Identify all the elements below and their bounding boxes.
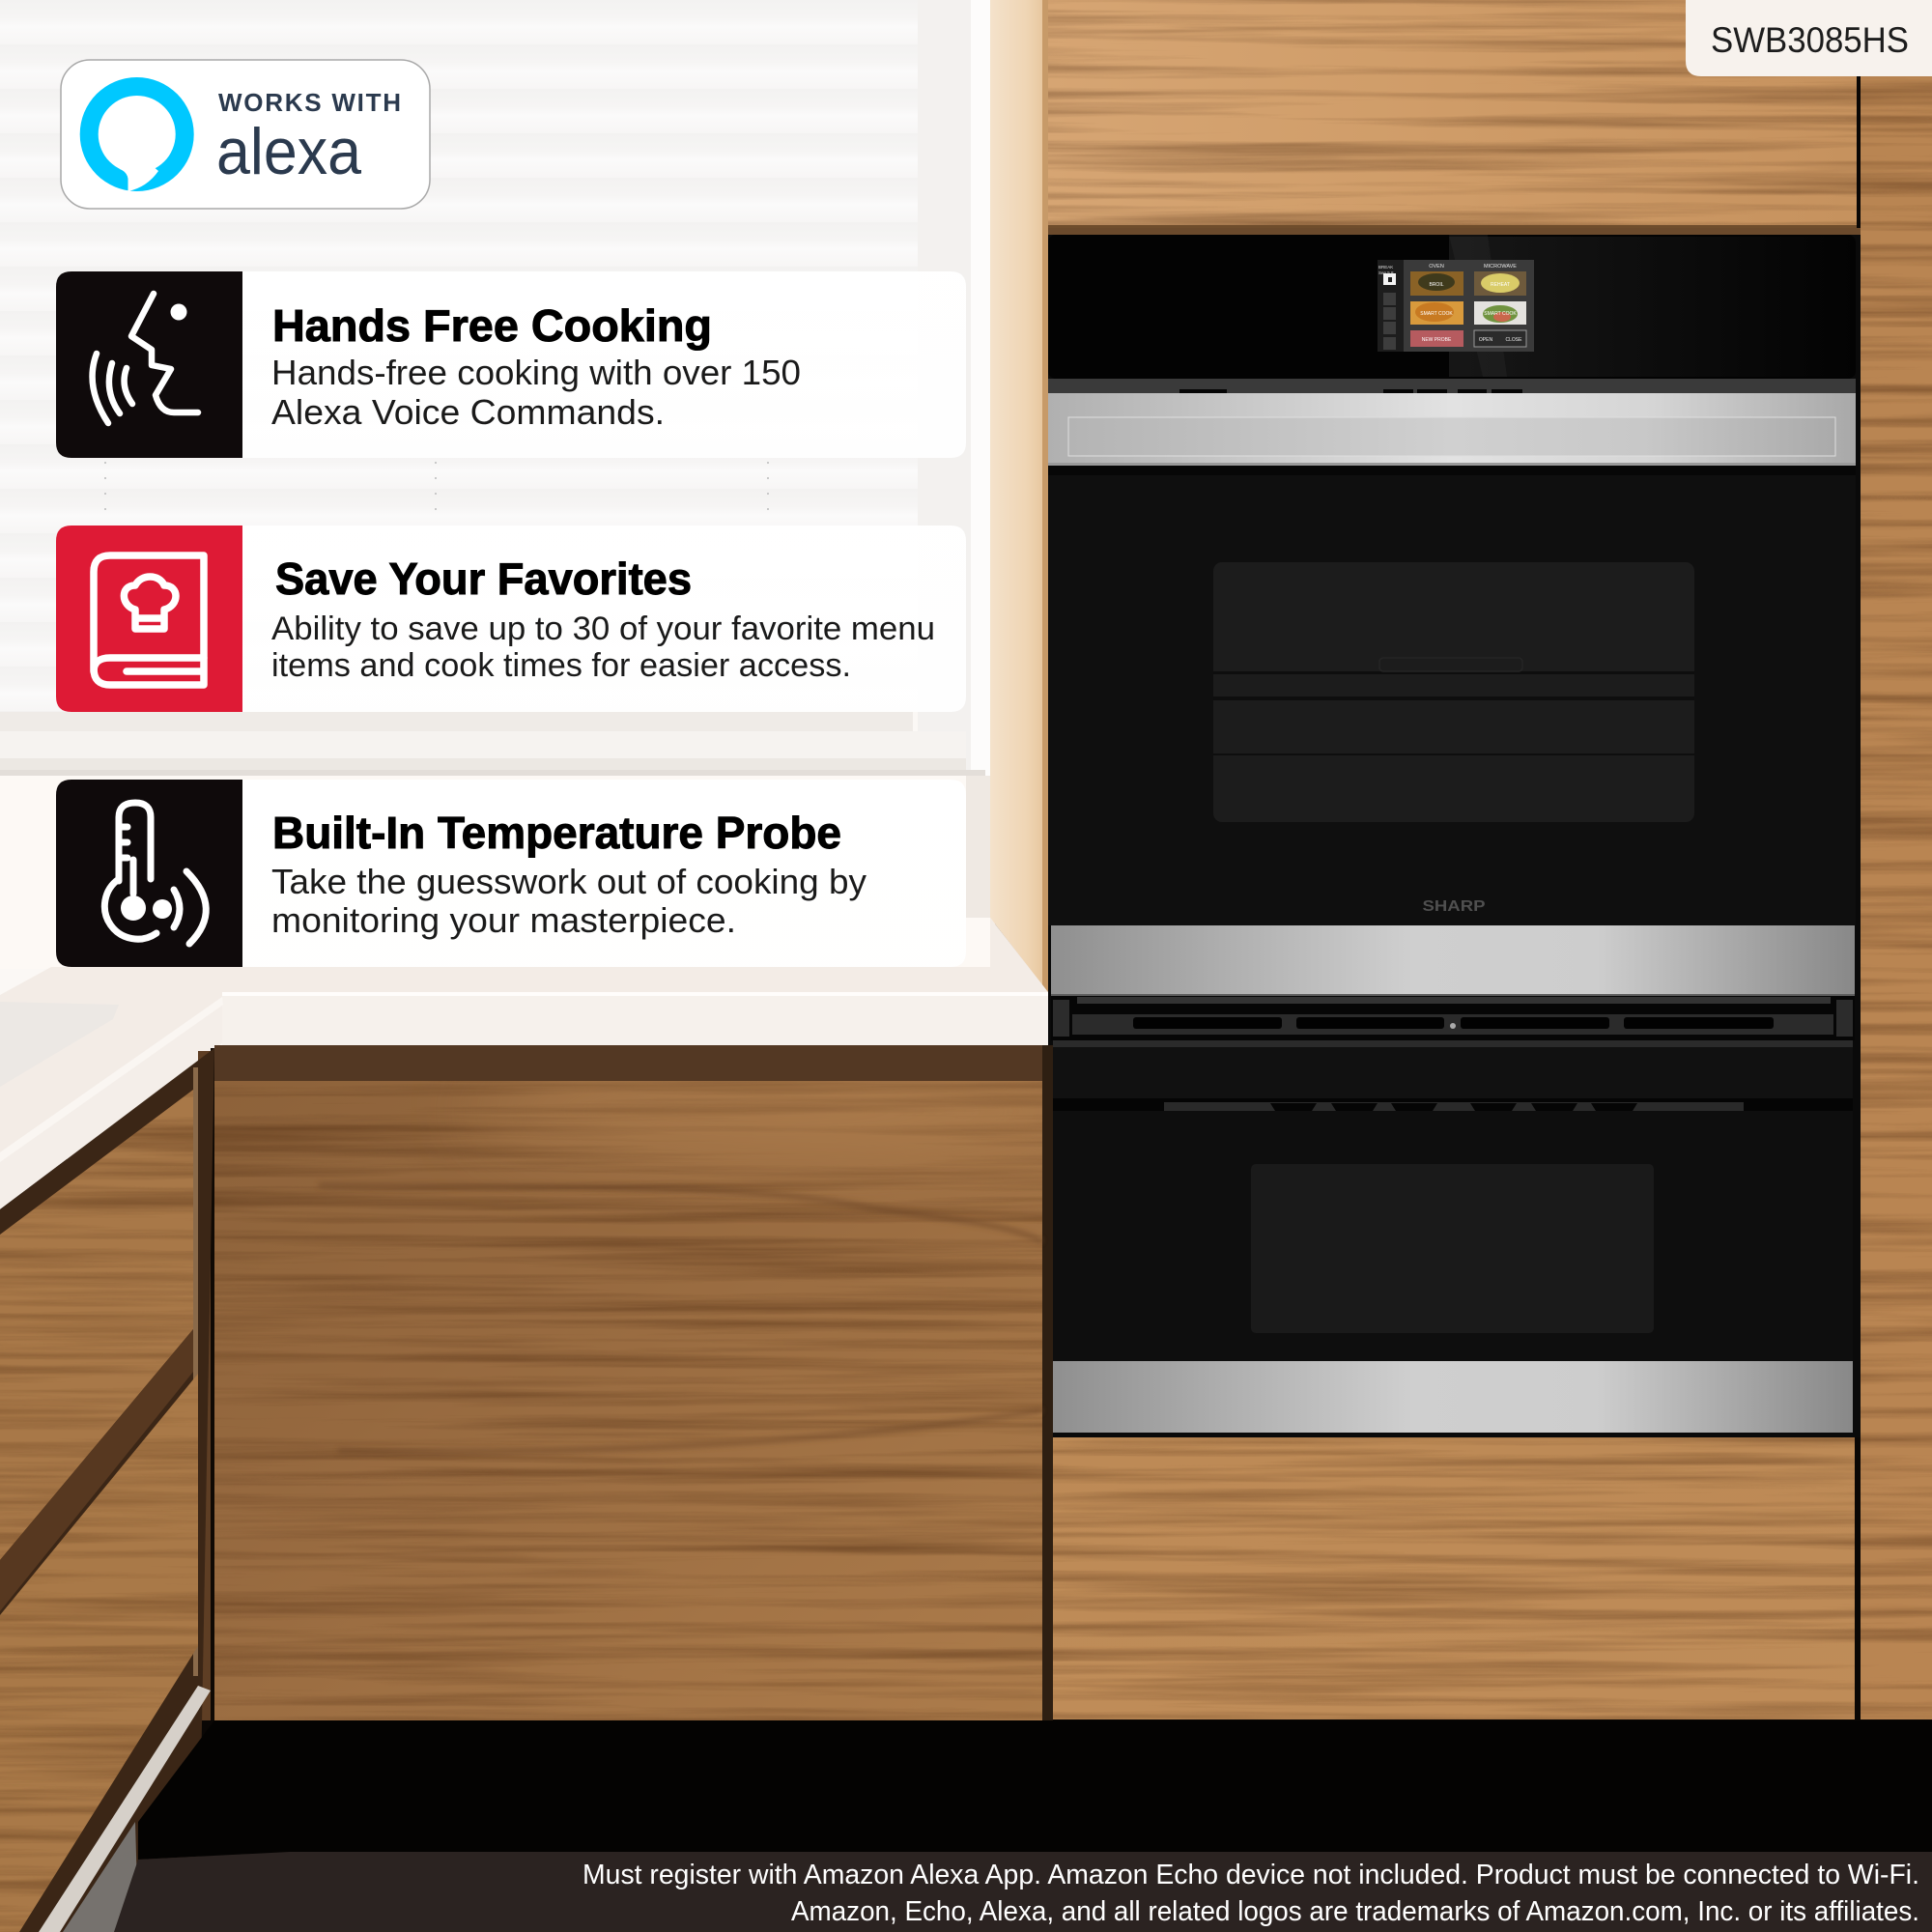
upper oven handle — [1048, 393, 1856, 466]
recess shadow behind oven — [1048, 228, 1861, 1437]
middle oven handle — [1051, 925, 1855, 996]
body text: Alexa Voice Commands. — [271, 392, 665, 432]
kickplate — [39, 1686, 211, 1932]
oven touchscreen: MICROWAVE — [1484, 264, 1517, 270]
lower oven fascia — [1053, 1040, 1853, 1111]
panel: hands free cooking — [56, 271, 966, 458]
lower oven door — [1053, 1111, 1853, 1361]
panel: built-in temperature probe — [56, 780, 966, 967]
oven touchscreen: OPEN — [1479, 337, 1492, 343]
oven touchscreen: REHEAT — [1491, 282, 1510, 288]
works with alexa badge — [61, 60, 430, 209]
footnote band — [114, 1852, 1932, 1932]
heading: Built-In Temperature Probe — [272, 808, 841, 858]
bottom oven handle — [1053, 1361, 1853, 1433]
heading: Hands Free Cooking — [272, 300, 712, 351]
body text: items and cook times for easier access. — [271, 647, 851, 684]
left drawers — [0, 1048, 214, 1932]
works with label: WORKS WITH — [218, 88, 401, 117]
lower right cabinet — [1053, 1437, 1855, 1719]
oven touchscreen: NEW PROBE — [1422, 337, 1452, 343]
heading: Save Your Favorites — [275, 554, 692, 604]
alexa wordmark: alexa — [216, 115, 361, 188]
panel: save your favorites — [56, 526, 966, 712]
side trim wood — [990, 0, 1048, 992]
oven touchscreen: OVEN — [1429, 264, 1444, 270]
oven touchscreen: SMART COOK — [1484, 311, 1517, 317]
body text: Ability to save up to 30 of your favorite menu — [271, 611, 935, 647]
footnote line 1: Must register with Amazon Alexa App. Amazon Echo device not included. Product must be connected to Wi-Fi. — [582, 1860, 1919, 1890]
body text — [271, 611, 935, 684]
oven touchscreen: Sep 5 8 — [1378, 270, 1394, 275]
floor — [138, 1720, 1932, 1860]
window with blinds — [0, 0, 995, 1159]
SHARP logo: SHARP — [1422, 898, 1486, 915]
oven touchscreen — [1378, 260, 1534, 352]
oven touchscreen: SMART COOK — [1420, 311, 1453, 317]
oven control panel — [1048, 235, 1856, 393]
centre lower cabinet — [198, 1045, 1111, 1720]
countertop — [0, 918, 1048, 1209]
oven touchscreen: BREAK — [1378, 265, 1393, 270]
body text — [271, 353, 801, 432]
body text: Hands-free cooking with over 150 — [271, 353, 801, 392]
vent gap — [1051, 996, 1855, 1040]
body text: monitoring your masterpiece. — [271, 900, 736, 940]
model number tag — [1686, 0, 1932, 76]
oven touchscreen: CLOSE — [1506, 337, 1522, 343]
upper cabinet — [1048, 0, 1857, 228]
icon: alexa ring — [80, 77, 194, 191]
body text — [271, 862, 867, 940]
icon: voice command — [56, 271, 242, 458]
model number tag: SWB3085HS — [1711, 20, 1909, 60]
upper oven door — [1048, 466, 1856, 925]
icon: thermometer probe — [56, 780, 242, 967]
oven touchscreen: BROIL — [1429, 282, 1444, 288]
right wood column — [1861, 0, 1932, 1719]
icon: recipe book — [56, 526, 242, 712]
body text: Take the guesswork out of cooking by — [271, 862, 867, 901]
